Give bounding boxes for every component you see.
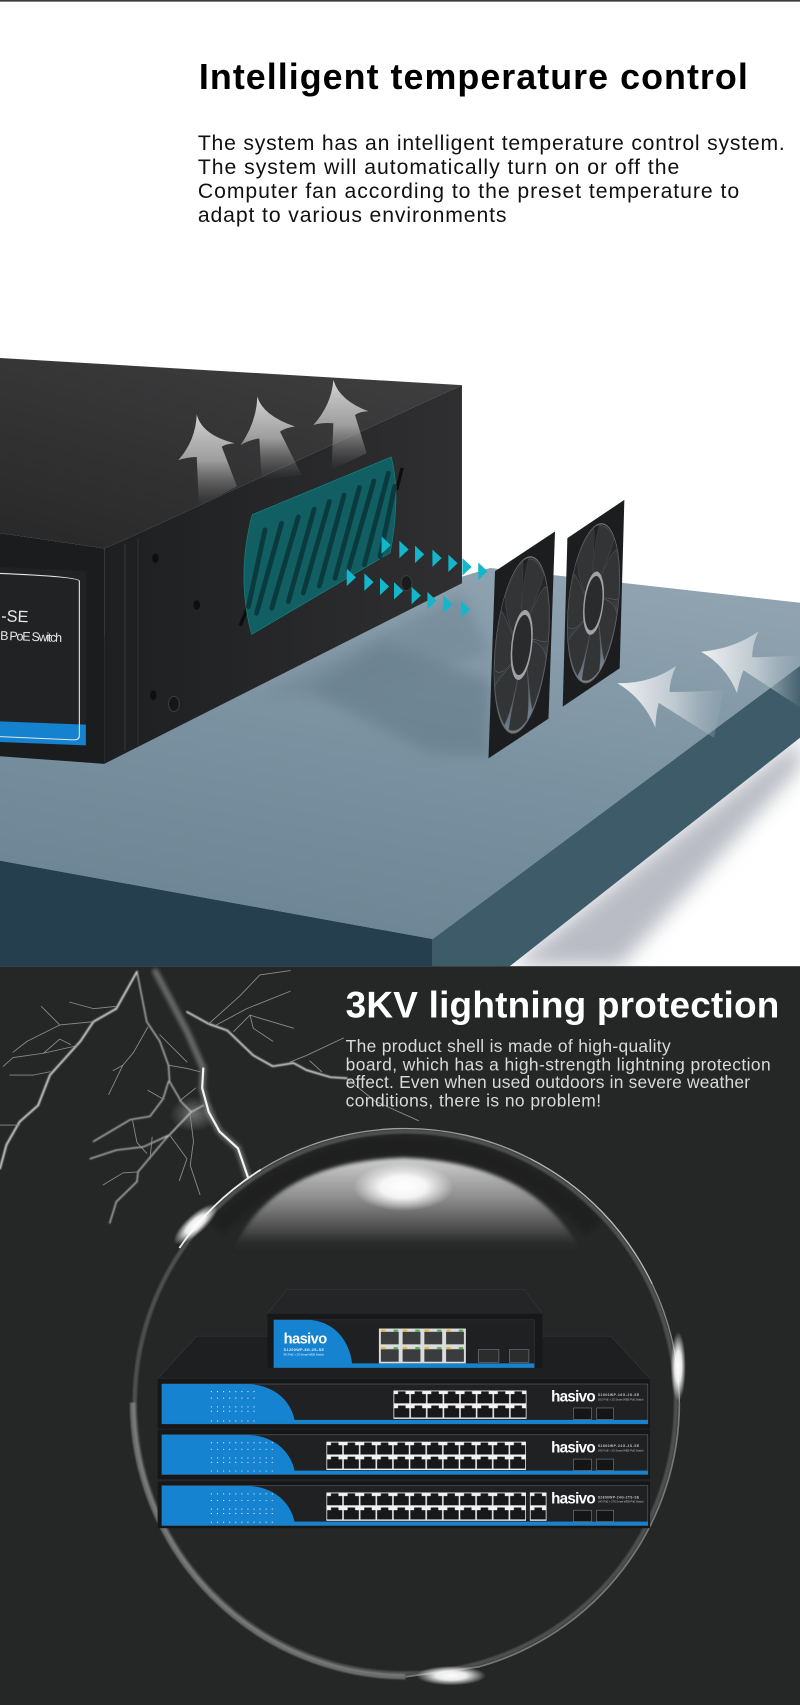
text block: temperature control description: The system has an intelligent temperature control system.: [198, 132, 785, 155]
switch side face: [104, 385, 462, 764]
switch: 16-port model: [158, 1379, 650, 1429]
model name: S2800WP-16G-2S-SE: [598, 1393, 640, 1397]
text block: temperature control description: Computer fan according to the preset temperature to: [198, 180, 739, 203]
switch top face: [0, 358, 462, 548]
text block: lightning protection description: [346, 1036, 771, 1111]
ethernet ports: [326, 1442, 526, 1470]
sphere ring band: [135, 1132, 676, 1673]
table front edge: [0, 861, 433, 966]
ring right line: [652, 1284, 679, 1403]
switch: 8-port small model: [267, 1289, 542, 1368]
model description: 16G PoE + 2S Smart WEB PoE Switch: [598, 1397, 644, 1401]
main bolt core: [202, 1068, 248, 1177]
model name: S2800WP-24G-2TS-SE: [598, 1495, 640, 1499]
dome highlight: [233, 1158, 582, 1251]
ring lower left highlight: [133, 1403, 405, 1677]
switch body: [0, 358, 462, 764]
switch front face: [0, 533, 104, 764]
ring top left bright line: [179, 1170, 261, 1248]
ring glow bottom: [416, 1666, 486, 1685]
heading: intelligent temperature control: Intelligent temperature control: [199, 57, 748, 97]
vent slots: [248, 473, 395, 613]
sphere inner shadow: [217, 1146, 593, 1228]
ring top fading line: [261, 1128, 530, 1170]
main bolt glow: [155, 972, 248, 1177]
text block: lightning protection description: effect. Even when used outdoors in severe weather: [346, 1072, 750, 1092]
front label panel: [0, 567, 86, 745]
SFP slots: [574, 1459, 614, 1471]
model description: 24G PoE + 2TS Smart WEB PoE Switch: [598, 1500, 644, 1504]
text block: lightning protection description: board, which has a high-strength lightning protection: [346, 1055, 771, 1075]
arrows: cool air drawn in from table: [617, 631, 800, 738]
panel: lightning protection background: [0, 966, 800, 1705]
text block: lightning protection description: The product shell is made of high-quality: [346, 1036, 671, 1056]
SFP slots: [478, 1350, 529, 1362]
status LEDs: [211, 1494, 276, 1522]
heading: 3KV lightning protection: 3KV lightning protection: [346, 984, 779, 1025]
illustration: switch on table with cooling fans: [0, 358, 800, 966]
blue brand panel: [162, 1384, 648, 1424]
label switch text: B PoE Switch: [0, 629, 62, 645]
brand logo text: hasivo: [551, 1440, 596, 1457]
primary branches: [0, 972, 347, 1223]
back switch top face: [158, 1336, 650, 1379]
SFP slots: [574, 1408, 614, 1419]
blue brand panel: [162, 1435, 648, 1474]
ring glow left: [168, 1198, 223, 1250]
ethernet ports: [393, 1391, 527, 1419]
label model text: -SE: [1, 607, 29, 626]
brand logo text: hasivo: [551, 1491, 596, 1508]
blue stripe on label: [0, 721, 86, 745]
illustration: glass sphere: [133, 1128, 686, 1685]
model name: S1200WP-8G-2S-SE: [284, 1348, 324, 1352]
uplink ports: [530, 1493, 547, 1521]
text block: temperature control description: [198, 132, 785, 227]
brand logo text: hasivo: [284, 1332, 327, 1348]
arrows: cyan airflow triangles: [347, 536, 488, 618]
switch: 24-port model: [158, 1430, 650, 1479]
teal vent plate: [244, 457, 396, 634]
table top surface: [0, 568, 800, 939]
secondary branches: [0, 971, 418, 1195]
icon: front cooling fan: [488, 522, 559, 767]
ring glow right: [671, 1332, 686, 1401]
ring lower right line: [405, 1403, 679, 1677]
blue brand panel: [274, 1320, 534, 1368]
ring top right line: [530, 1159, 652, 1284]
ethernet ports: [379, 1329, 466, 1363]
ethernet ports: [326, 1493, 526, 1521]
table right edge: [433, 666, 800, 966]
floor shadow below table: [510, 738, 800, 966]
arrows: warm air rising: [178, 380, 368, 506]
fan shadow on table: [310, 642, 489, 756]
model description: 8G PoE + 2S Smart WEB Switch: [284, 1353, 324, 1357]
text block: temperature control description: adapt to various environments: [198, 204, 507, 227]
text block: temperature control description: The system will automatically turn on or off the: [198, 156, 679, 179]
vent highlight panel: [240, 457, 402, 634]
blue brand panel: [162, 1486, 648, 1525]
brand logo text: hasivo: [551, 1388, 596, 1405]
model name: S2800WP-24G-2S-SE: [598, 1444, 640, 1448]
SFP slots: [574, 1510, 614, 1522]
switch: 24-port plus uplink model: [158, 1481, 650, 1528]
side screws: [150, 553, 412, 712]
model description: 24G PoE + 2S Smart WEB PoE Switch: [598, 1448, 644, 1452]
icon: rear cooling fan: [562, 491, 628, 715]
illustration: lightning bolts: [0, 971, 418, 1223]
text block: lightning protection description: conditions, there is no problem!: [346, 1091, 601, 1111]
status LEDs: [211, 1392, 255, 1421]
label outline: [0, 573, 79, 740]
dome hot spot: [353, 1163, 453, 1211]
status LEDs: [211, 1443, 276, 1471]
